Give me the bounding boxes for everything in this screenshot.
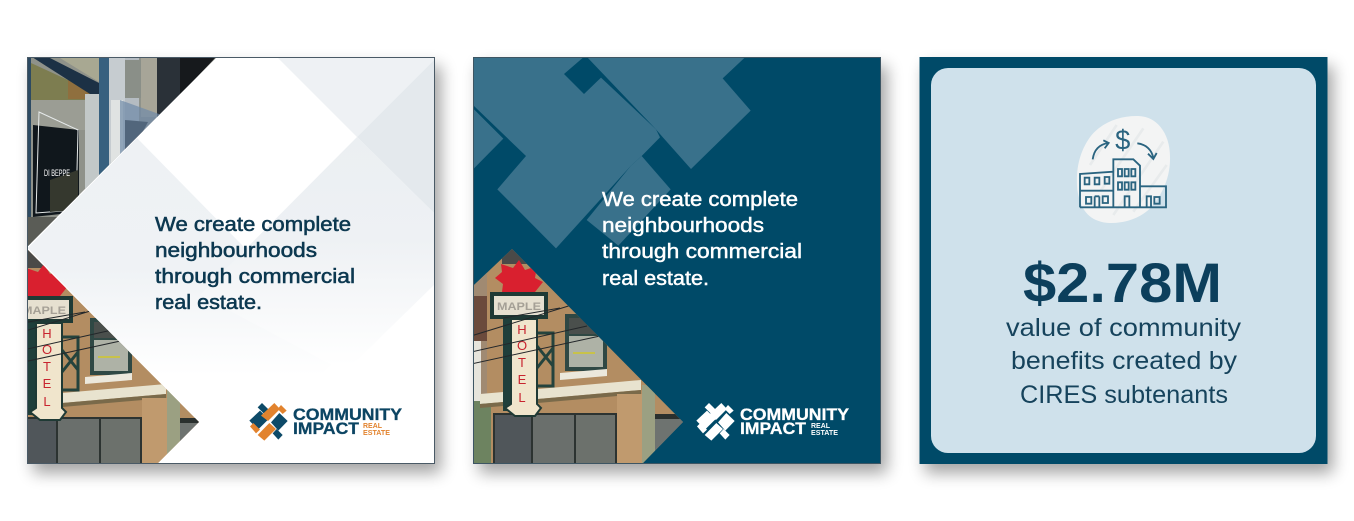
logo: colour: ESTATE [363,430,390,437]
headline text [155,214,355,314]
logo: colour: COMMUNITY [293,405,403,424]
logo: colour: REAL [363,423,383,430]
photo: storefront [27,57,217,257]
logo: white: COMMUNITY [740,405,850,424]
description: benefits created by [1011,347,1238,375]
description: value of community [1006,314,1242,342]
headline text: real estate. [602,268,709,290]
logo: white [696,403,850,441]
panel: white card with photo [0,57,441,473]
logo: colour: IMPACT [293,419,360,438]
big number: $2.78M [1023,251,1222,314]
photo: Maple Hotel [28,250,199,463]
icon: buildings with dollar sign: $ [1115,125,1130,156]
headline text: through commercial [155,266,355,288]
background geometric shapes [474,57,751,248]
headline text: We create complete [155,214,351,236]
photo: storefront: DI BEPPE [44,168,70,178]
headline text: through commercial [602,241,802,263]
logo mark [696,403,735,441]
logo mark [249,403,288,441]
headline text: neighbourhoods [155,240,317,262]
headline text: real estate. [155,292,262,314]
icon: buildings with dollar sign [1077,116,1170,223]
panel: navy card with photo [471,57,887,473]
panel: statistic card [920,57,1333,473]
description: CIRES subtenants [1020,381,1228,409]
logo: white: IMPACT [740,419,807,438]
logo: colour [249,403,403,441]
logo: white: ESTATE [811,430,838,437]
headline text [602,189,802,290]
headline text: neighbourhoods [602,215,764,237]
logo: white: REAL [811,423,831,430]
background geometric shapes [28,58,434,440]
description [1006,314,1242,409]
photo: Maple Hotel [474,249,683,463]
headline text: We create complete [602,189,798,211]
